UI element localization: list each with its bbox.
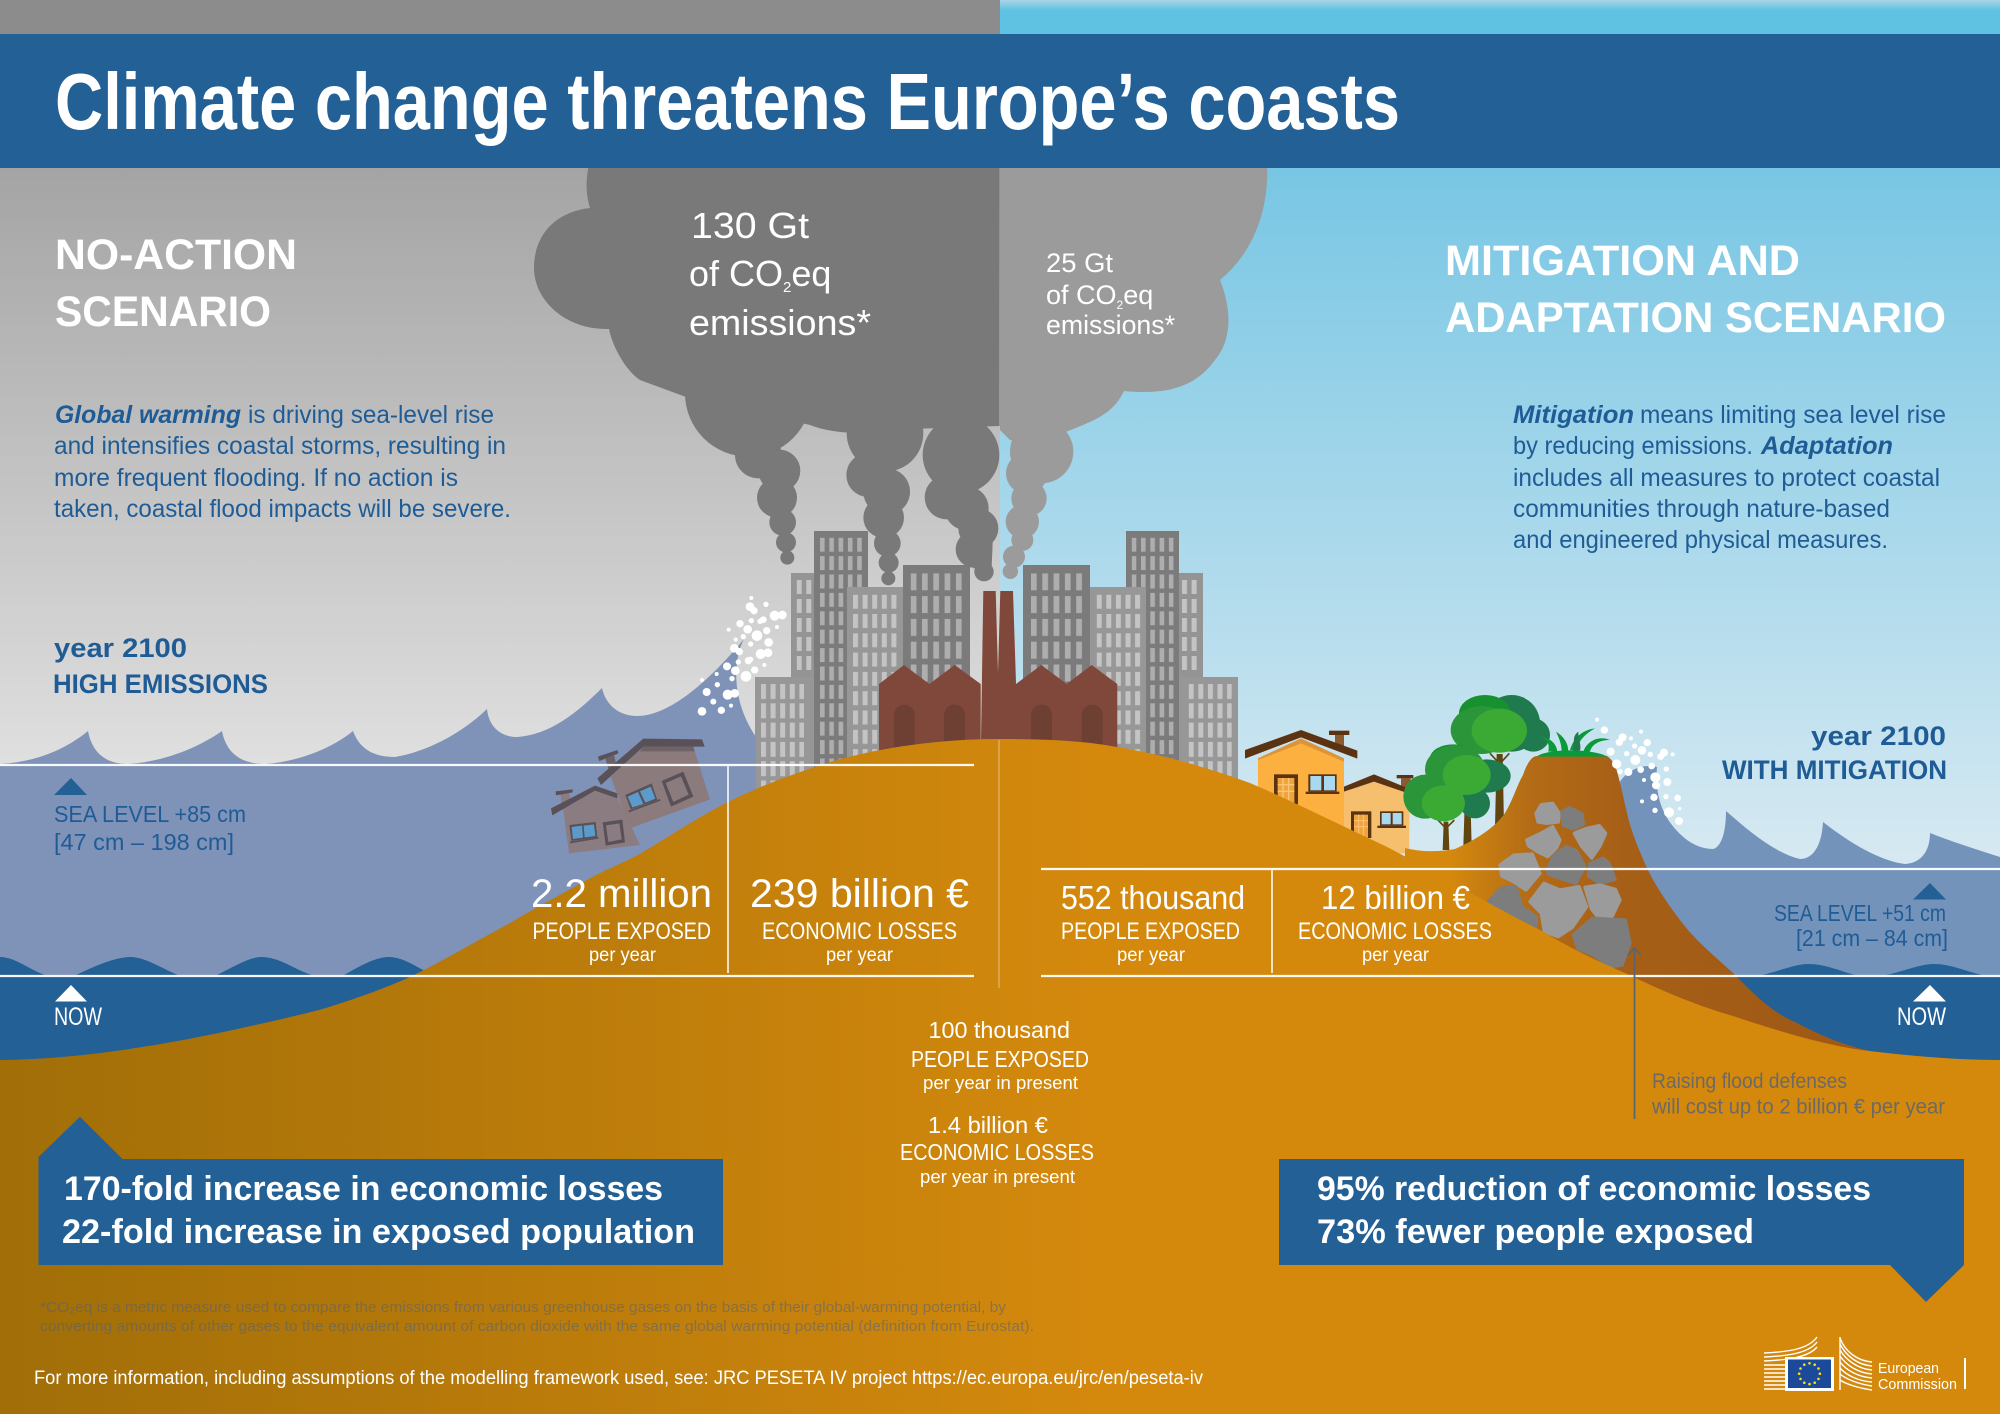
- callout: no-action increase: 22-fold increase in exposed population: [62, 1213, 695, 1251]
- stat: 12 billion euro economic losses: per year: [1362, 945, 1430, 966]
- label: year 2100 high emissions: [53, 633, 268, 699]
- stat: present day exposure and losses: per year in present: [923, 1073, 1078, 1093]
- house small: [1344, 774, 1413, 853]
- present-day water right: [1720, 964, 2000, 1070]
- label: year 2100 with mitigation: WITH MITIGATION: [1722, 755, 1947, 785]
- stat: present day exposure and losses: per year in present: [920, 1167, 1075, 1187]
- city buildings left: [755, 531, 970, 817]
- callout: mitigation reduction: [1279, 1159, 1964, 1302]
- dike: [1405, 756, 1870, 1051]
- centre divider: [998, 740, 1000, 988]
- stat: 239 billion euro economic losses: [750, 872, 969, 966]
- background: grey sky: [0, 0, 1000, 868]
- emissions label: 25 Gt: emissions*: [1046, 310, 1175, 340]
- stat: 552 thousand people exposed: [1061, 879, 1245, 966]
- label: year 2100 high emissions: HIGH EMISSIONS: [53, 669, 268, 699]
- logo building left: [1764, 1337, 1817, 1389]
- stat: 12 billion euro economic losses: [1298, 879, 1492, 966]
- sea level label right: [1774, 883, 1948, 951]
- sea level label left: [47 cm – 198 cm]: [54, 829, 234, 855]
- heading: mitigation and adaptation scenario: [1445, 237, 1946, 342]
- source line: For more information, including assumptions of the modelling framework used, see: JRC PESETA IV project https://ec.europa.eu/jrc/en/peseta-iv: [34, 1368, 1203, 1389]
- city buildings right: [1023, 531, 1238, 817]
- stat: 12 billion euro economic losses: 12 billion €: [1321, 879, 1470, 916]
- text: cost of raising flood defenses: will cost up to 2 billion € per year: [1651, 1096, 1945, 1118]
- small grey emissions cloud: [1000, 160, 1267, 579]
- text: mitigation and adaptation explanation: Mitigation: [1513, 401, 1634, 429]
- callout: no-action increase: 170-fold increase in economic losses: [64, 1170, 663, 1208]
- label: year 2100 with mitigation: year 2100: [1811, 721, 1946, 751]
- text: global warming explanation: [54, 401, 511, 523]
- sea level guide lines left: [0, 765, 974, 976]
- emissions label: 130 Gt: emissions*: [689, 302, 871, 343]
- title banner: [0, 34, 2000, 168]
- flooded large house: [597, 739, 710, 828]
- emissions label: 25 Gt: eq: [1123, 280, 1153, 310]
- stat: 2.2 million people exposed: PEOPLE EXPOSED: [532, 918, 711, 945]
- text: mitigation and adaptation explanation: means limiting sea level rise: [1640, 401, 1946, 429]
- label: year 2100 with mitigation: [1722, 721, 1947, 785]
- factory with chimneys: [879, 591, 1117, 770]
- stat: 552 thousand people exposed: PEOPLE EXPOSED: [1061, 918, 1240, 945]
- now marker left: NOW: [54, 1003, 102, 1031]
- wave spray right: [1595, 718, 1683, 825]
- text: global warming explanation: is driving sea-level rise: [248, 401, 494, 429]
- text: global warming explanation: Global warming: [55, 401, 241, 429]
- emissions label: 25 Gt: of CO: [1046, 280, 1117, 310]
- text: mitigation and adaptation explanation: by reducing emissions.: [1513, 432, 1753, 460]
- footnote: converting amounts of other gases to the equivalent amount of carbon dioxide with the same global warming potential (definition from Eurostat).: [40, 1318, 1034, 1335]
- heading: mitigation and adaptation scenario: ADAPTATION SCENARIO: [1445, 294, 1946, 342]
- now marker left: [54, 985, 102, 1031]
- sea level label right: SEA LEVEL +51 cm: [1774, 900, 1946, 926]
- emissions label: 25 Gt: [1046, 248, 1175, 340]
- stat: present day exposure and losses: 1.4 billion €: [928, 1112, 1048, 1138]
- background: blue sky: [1000, 0, 2000, 898]
- emissions label: 130 Gt: eq: [791, 253, 831, 294]
- heading: mitigation and adaptation scenario: MITIGATION AND: [1445, 237, 1800, 285]
- text: global warming explanation: and intensifies coastal storms, resulting in: [54, 432, 506, 460]
- flood water right: sea level 2100 with mitigation: [1605, 766, 2000, 985]
- tree big: [1451, 695, 1550, 827]
- stat: 552 thousand people exposed: 552 thousand: [1061, 879, 1245, 916]
- heading: no-action scenario: NO-ACTION: [55, 231, 297, 279]
- text: mitigation and adaptation explanation: [1513, 401, 1946, 554]
- callout: no-action increase: [38, 1117, 723, 1265]
- stat: 2.2 million people exposed: 2.2 million: [531, 872, 712, 916]
- heading: no-action scenario: [55, 231, 297, 336]
- arrow: flood defense height: [1628, 948, 1641, 1119]
- ground hill: [0, 739, 2000, 1414]
- heading: no-action scenario: SCENARIO: [55, 288, 271, 336]
- emissions label: 130 Gt: [689, 205, 871, 343]
- stat: present day exposure and losses: ECONOMIC LOSSES: [900, 1139, 1094, 1165]
- logo building right: [1840, 1337, 1872, 1390]
- present-day water left: [0, 957, 520, 1075]
- logo wordmark: Commission: [1878, 1376, 1957, 1393]
- text: mitigation and adaptation explanation: Adaptation: [1760, 432, 1893, 460]
- flooded small house: [551, 786, 640, 853]
- emissions label: 25 Gt: 2: [1117, 298, 1124, 312]
- now marker right: NOW: [1897, 1003, 1946, 1031]
- big dark emissions cloud: [534, 160, 1000, 585]
- logo EU flag: [1785, 1357, 1834, 1391]
- callout: mitigation reduction: 73% fewer people exposed: [1317, 1213, 1754, 1251]
- stat: 239 billion euro economic losses: 239 billion €: [750, 872, 969, 916]
- text: mitigation and adaptation explanation: includes all measures to protect coastal: [1513, 464, 1940, 492]
- stat: 552 thousand people exposed: per year: [1117, 945, 1186, 966]
- title: Climate change threatens Europe’s coasts: [55, 57, 1400, 146]
- text: cost of raising flood defenses: [1651, 1070, 1945, 1118]
- now marker right: [1897, 985, 1946, 1031]
- footnote: *CO₂eq is a metric measure used to compare the emissions from various greenhouse gases on the basis of their global-warming potential, by: [40, 1299, 1006, 1316]
- emissions label: 130 Gt: 130 Gt: [691, 205, 809, 246]
- text: global warming explanation: more frequent flooding. If no action is: [54, 464, 458, 492]
- footnote: [40, 1299, 1034, 1335]
- text: mitigation and adaptation explanation: communities through nature-based: [1513, 495, 1890, 523]
- sea level label left: [54, 778, 246, 855]
- stat: present day exposure and losses: 100 thousand: [928, 1017, 1070, 1043]
- grass on dike: [1537, 728, 1610, 757]
- stat: present day exposure and losses: PEOPLE EXPOSED: [911, 1046, 1089, 1072]
- flood water left: sea level 2100 high emissions: [0, 639, 756, 990]
- text: global warming explanation: taken, coastal flood impacts will be severe.: [54, 495, 511, 523]
- stat: 12 billion euro economic losses: ECONOMIC LOSSES: [1298, 918, 1492, 945]
- wave spray left: [698, 596, 787, 716]
- emissions label: 130 Gt: of CO: [689, 253, 783, 294]
- emissions label: 130 Gt: 2: [783, 279, 791, 296]
- flooded houses: [551, 739, 710, 853]
- stat: 2.2 million people exposed: [531, 872, 712, 966]
- tree small: [1403, 775, 1465, 850]
- sea level label right: [21 cm – 84 cm]: [1796, 925, 1948, 951]
- stat: 239 billion euro economic losses: ECONOMIC LOSSES: [762, 918, 957, 945]
- tree middle: [1425, 744, 1511, 847]
- house large: [1245, 730, 1357, 853]
- callout: mitigation reduction: 95% reduction of economic losses: [1317, 1170, 1871, 1208]
- stat: present day exposure and losses: [900, 1017, 1094, 1187]
- stat: 239 billion euro economic losses: per year: [826, 945, 894, 966]
- text: mitigation and adaptation explanation: and engineered physical measures.: [1513, 526, 1888, 554]
- sea level guide lines right: [1041, 869, 2000, 976]
- logo wordmark: [1878, 1360, 1957, 1393]
- label: year 2100 high emissions: year 2100: [54, 633, 187, 663]
- logo wordmark: European: [1878, 1360, 1939, 1377]
- sea level label left: SEA LEVEL +85 cm: [54, 801, 246, 827]
- rocks: [1488, 803, 1630, 967]
- European Commission logo: [1764, 1337, 1966, 1393]
- houses on the hill: [1245, 695, 1550, 853]
- emissions label: 25 Gt: 25 Gt: [1046, 248, 1113, 278]
- stat: 2.2 million people exposed: per year: [589, 945, 657, 966]
- text: cost of raising flood defenses: Raising flood defenses: [1652, 1070, 1847, 1093]
